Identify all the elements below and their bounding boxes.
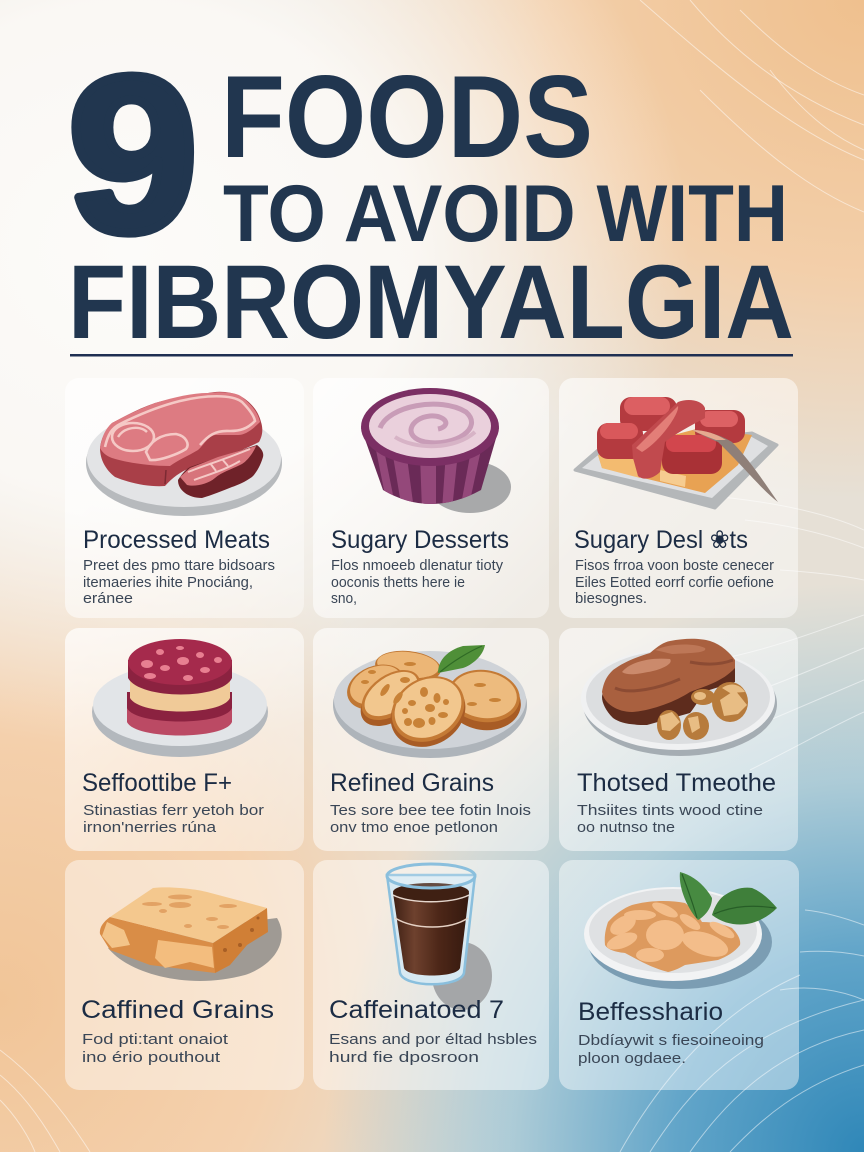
- icon: dessert cup: [361, 388, 511, 513]
- panel: sugary desserts variant: [559, 378, 798, 618]
- heading: Refined Grains: [330, 769, 494, 797]
- heading: Sugary Desl ❀ts: [574, 526, 748, 554]
- description: onv tmo enoe petlonon: [330, 819, 498, 836]
- panel: refined grains: [313, 628, 549, 851]
- heading: Processed Meats: [83, 526, 270, 554]
- panel: caffeinated: [313, 860, 549, 1090]
- description: Flos nmoeeb dlenatur tioty: [331, 557, 503, 574]
- description: ino ério pouthout: [82, 1049, 221, 1066]
- icon: meat on plate: [86, 392, 282, 516]
- description: hurd fie dposroon: [329, 1049, 479, 1066]
- back slices: [340, 648, 525, 737]
- description: Fisos frroa voon boste cenecer: [575, 557, 774, 574]
- heading: Caffined Grains: [81, 996, 274, 1024]
- title line: FOODS: FOODS: [221, 51, 593, 182]
- description: Tes sore bee tee fotin lnois: [330, 802, 531, 819]
- icon: fried food with leaves on plate: [584, 872, 777, 989]
- title line: FIBROMYALGIA: FIBROMYALGIA: [68, 244, 794, 361]
- panel: beffesshario: [559, 860, 799, 1090]
- icon: brown meat and nuts on plate: [581, 639, 777, 756]
- panel: caffined grains: [65, 860, 304, 1090]
- heading: Thotsed Tmeothe: [577, 769, 776, 797]
- panel: saturated fats: [65, 628, 304, 851]
- icon: cake block: [100, 887, 282, 981]
- description: Preet des pmo ttare bidsoars: [83, 557, 275, 574]
- description: ooconis thetts here ie: [331, 574, 465, 591]
- description: Eiles Eotted eorrf corfie oefione: [575, 574, 774, 591]
- description: oo nutnso tne: [577, 819, 675, 836]
- big number 9: 9: [68, 31, 198, 279]
- description: ploon ogdaee.: [578, 1050, 686, 1067]
- heading: Caffeinatoed 7: [329, 996, 504, 1024]
- description: eránee: [83, 590, 133, 607]
- heading: Beffesshario: [578, 998, 723, 1026]
- panel: processed meats: [65, 378, 304, 618]
- description: irnon'nerries rúna: [83, 819, 217, 836]
- panel: sugary desserts: [313, 378, 549, 618]
- description: Dbdíaywit s fiesoineoing: [578, 1032, 764, 1049]
- front slice: [378, 663, 478, 760]
- heading: Seffoottibe F+: [82, 769, 232, 797]
- panel: thotsed tmeothe: [559, 628, 798, 851]
- description: biesognes.: [575, 590, 647, 607]
- description: Esans and por éltad hsbles: [329, 1031, 537, 1048]
- heading: Sugary Desserts: [331, 526, 509, 554]
- title underline: [70, 354, 793, 356]
- description: Stinastias ferr yetoh bor: [83, 802, 264, 819]
- icon: red cubes on tray: [575, 397, 778, 508]
- icon: bread slices on plate: [333, 645, 527, 760]
- leaf: [438, 645, 485, 673]
- icon: layered sausage stack: [92, 639, 268, 757]
- title: [68, 31, 794, 361]
- icon: glass of dark drink: [387, 864, 492, 1010]
- title line: TO AVOID WITH: TO AVOID WITH: [223, 169, 788, 259]
- description: Thsiites tints wood ctine: [577, 802, 763, 819]
- description: itemaeries ihite Pnociáng,: [83, 574, 253, 591]
- description: sno,: [331, 590, 357, 607]
- description: Fod pti:tant onaiot: [82, 1031, 229, 1048]
